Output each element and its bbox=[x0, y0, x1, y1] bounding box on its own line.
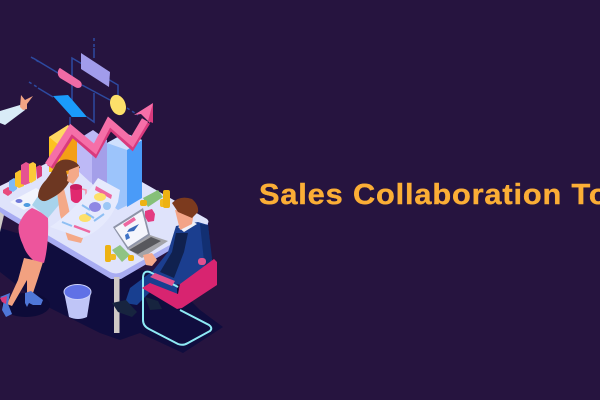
hand bbox=[143, 253, 157, 266]
woman bbox=[0, 160, 83, 317]
hair bbox=[38, 160, 80, 201]
pink box bbox=[145, 209, 155, 222]
pink pill bbox=[58, 68, 82, 88]
top bbox=[32, 187, 63, 218]
seat and back bbox=[142, 259, 217, 309]
legs bbox=[7, 258, 43, 306]
jacket bbox=[152, 222, 212, 288]
bar charts bbox=[49, 125, 142, 210]
hand pointing bbox=[0, 95, 33, 125]
neck and head bbox=[175, 210, 194, 230]
blue parallelogram bbox=[53, 95, 87, 117]
floor shadow bbox=[0, 228, 223, 353]
armrest bbox=[150, 273, 175, 286]
flowchart poster bbox=[50, 178, 120, 238]
frame bbox=[143, 272, 211, 345]
desk leg bbox=[114, 277, 120, 333]
coins and cash, back bbox=[140, 190, 170, 208]
mini bars on desk bbox=[3, 162, 42, 196]
desk bbox=[0, 163, 208, 333]
coins and cash, front bbox=[105, 245, 134, 262]
man bbox=[112, 198, 212, 317]
shirt collar bbox=[178, 220, 197, 232]
headrest knob bbox=[198, 258, 206, 265]
arm bbox=[57, 189, 83, 243]
mug bbox=[70, 184, 86, 203]
yellow circle bbox=[107, 92, 129, 118]
purple card bbox=[81, 53, 110, 87]
skirt bbox=[18, 208, 48, 263]
waste bin bbox=[64, 284, 91, 319]
trousers bbox=[125, 273, 177, 305]
face bbox=[67, 166, 79, 184]
chair bbox=[142, 258, 217, 345]
floating flowchart diagram bbox=[29, 38, 138, 125]
rising arrow bbox=[48, 103, 153, 167]
paper on desk bbox=[10, 188, 50, 210]
laptop bbox=[113, 208, 168, 258]
shadow bbox=[2, 293, 50, 317]
shoes bbox=[0, 293, 12, 317]
